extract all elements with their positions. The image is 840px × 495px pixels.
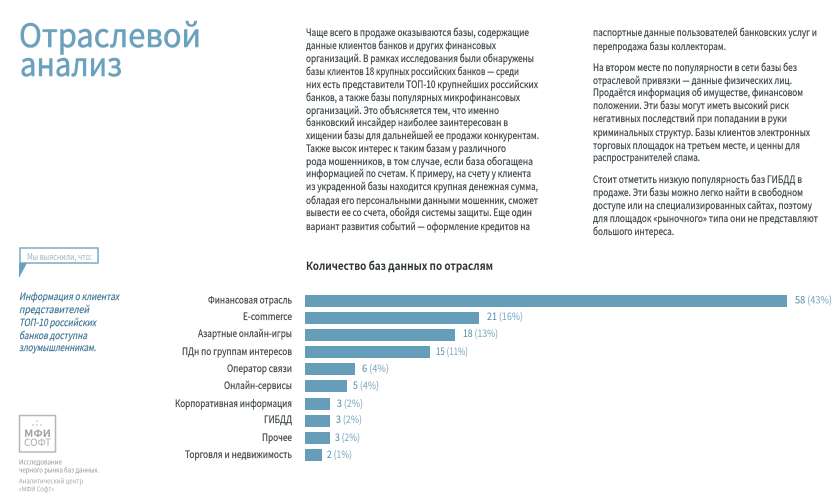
text block: left column: хищении базы для дальнейшей ее продажи конкурентам. (306, 127, 539, 142)
value labels: 18 (13%) (463, 325, 498, 340)
callout text (19, 288, 121, 354)
text block: left column: обладая его персональными данными мошенник, сможет (306, 192, 538, 207)
value labels: 2 (1%) (327, 446, 352, 461)
category labels: Онлайн-сервисы (224, 377, 292, 392)
value labels: 21 (16%) (487, 308, 523, 323)
value labels: 3 (2%) (337, 395, 363, 410)
text block: left column: данные клиентов банков и других финансовых (306, 37, 496, 52)
source note: «МФИ Софт» (19, 484, 54, 494)
title: Отраслевой (19, 11, 201, 57)
text block: right column (593, 24, 818, 238)
text block: left column: банковский инсайдер наиболее заинтересован в (306, 114, 508, 129)
callout text: Информация о клиентах (19, 288, 121, 303)
text block: left column: организаций. Это объясняется тем, что именно (306, 102, 499, 117)
value labels: 6 (4%) (362, 360, 389, 375)
text block: left column: Чаще всего в продаже оказываются базы, содержащие (306, 24, 529, 39)
value labels: 3 (2%) (336, 411, 362, 426)
text block: right column: большого интереса. (593, 223, 674, 238)
callout: we found out: Мы выяснили, что: (27, 250, 92, 263)
source note: Аналитический центр (19, 476, 83, 486)
category labels: E-commerce (243, 308, 292, 323)
title (19, 11, 201, 86)
category labels: ГИБДД (264, 411, 292, 426)
callout text: ТОП-10 российских (19, 314, 98, 329)
logo: МФИ (24, 425, 51, 440)
text block: left column (306, 24, 539, 233)
text block: right column: негативных последствий при попадании в руки (593, 110, 787, 125)
text block: left column: информацией по счетам. К примеру, на счету у клиента (306, 165, 531, 180)
callout text: банков доступна (19, 327, 87, 342)
text block: left column: банков, а также базы популярных микрофинансовых (306, 89, 520, 104)
text block: right column: отраслевой привязки — данные физических лиц. (593, 72, 792, 87)
value labels: 5 (4%) (353, 377, 379, 392)
text block: left column: Также высок интерес к таким базам у различного (306, 140, 506, 155)
callout text: представителей (19, 301, 90, 316)
text block: left column: базы клиентов 18 крупных российских банков — среди (306, 63, 519, 78)
text block: right column: На втором месте по популярности в сети базы без (593, 59, 797, 74)
value labels (327, 292, 832, 461)
category labels (175, 292, 292, 461)
text block: right column: перепродажа базы коллекторам. (593, 38, 726, 53)
text block: left column: организаций. В рамках исследования были обнаружены (306, 50, 534, 65)
text block: right column: Стоит отметить низкую популярность баз ГИБДД в (593, 171, 802, 186)
text block: right column: продаже. Эти базы можно легко найти в свободном (593, 184, 803, 199)
value labels: 3 (2%) (335, 429, 360, 444)
category labels: Оператор связи (227, 360, 292, 375)
bar chart (175, 292, 832, 461)
logo: СОФТ (24, 434, 51, 449)
text block: right column: положении. Эти базы могут иметь высокий риск (593, 97, 789, 112)
text block: left column: вариант развития событий — оформление кредитов на (306, 218, 530, 233)
text block: right column: торговых площадок на третьем месте, и ценны для (593, 137, 800, 152)
category labels: ПДн по группам интересов (182, 343, 292, 358)
callout: we found out (19, 248, 98, 278)
text block: left column: них есть представители ТОП-10 крупнейших российских (306, 76, 538, 91)
category labels: Торговля и недвижимость (185, 446, 292, 461)
value labels: 58 (43%) (795, 292, 832, 306)
source note: Исследование (19, 456, 62, 466)
category labels: Азартные онлайн-игры (198, 325, 292, 340)
value labels: 15 (11%) (436, 343, 468, 358)
source note (19, 456, 99, 494)
text block: left column: из украденной базы находится крупная денежная сумма, (306, 178, 538, 193)
category labels: Финансовая отрасль (208, 292, 292, 306)
text block: left column: рода мошенников, в том случае, если база обогащена (306, 153, 533, 168)
callout text: злоумышленникам. (19, 339, 96, 354)
logo (20, 416, 56, 452)
category labels: Корпоративная информация (175, 395, 292, 410)
source note: черного рынка баз данных. (19, 464, 99, 474)
text block: left column: вывести ее со счета, обойдя системы защиты. Еще один (306, 204, 532, 219)
title: анализ (20, 40, 122, 86)
chart heading: Количество баз данных по отраслям (306, 258, 493, 274)
bars (305, 295, 787, 461)
category labels: Прочее (262, 429, 292, 444)
text block: right column: распространителей спама. (593, 149, 700, 164)
